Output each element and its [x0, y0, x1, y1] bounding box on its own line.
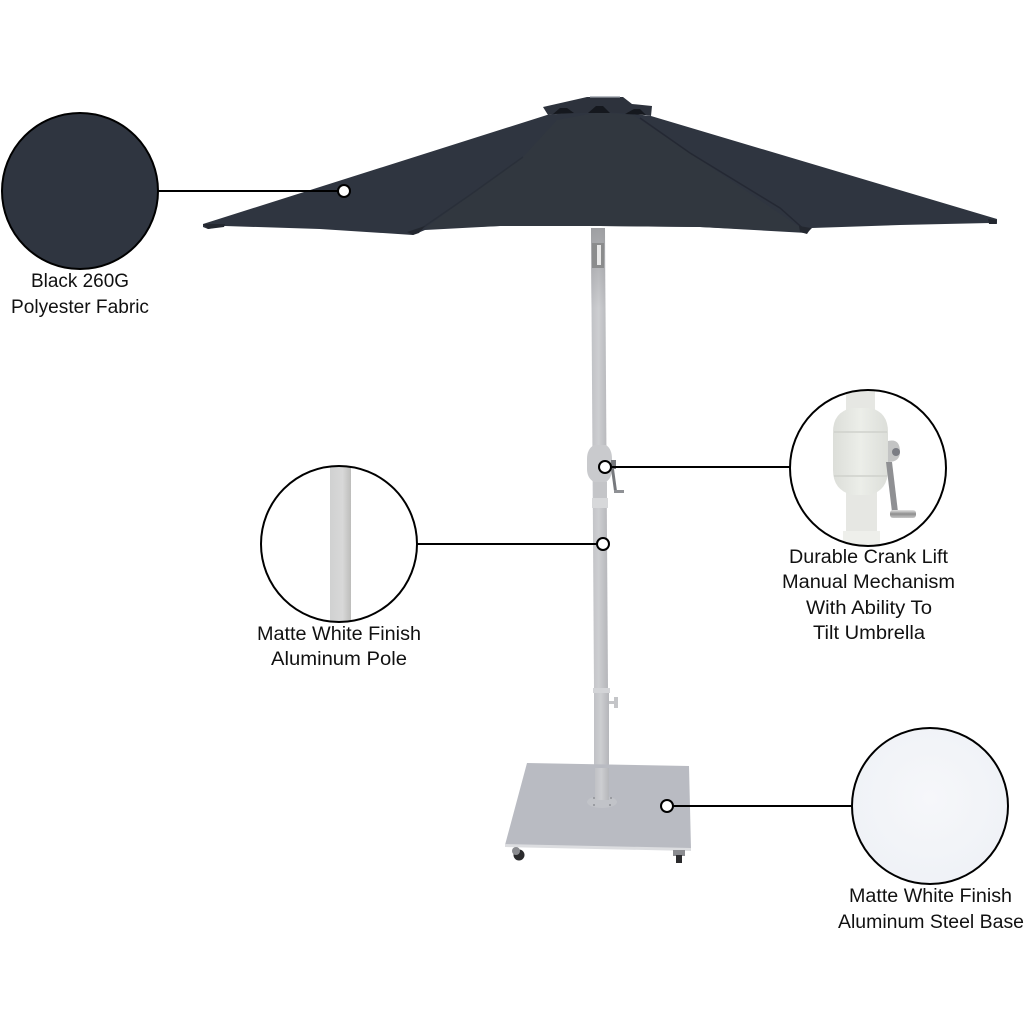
label: fabric: Polyester Fabric	[11, 297, 149, 318]
detail circle: crank	[790, 385, 946, 551]
label: crank: Tilt Umbrella	[813, 623, 925, 644]
canopy finial	[543, 96, 652, 116]
callout dot: pole	[597, 538, 609, 550]
callout dot: base	[661, 800, 673, 812]
callout dot: crank	[599, 461, 611, 473]
label: base: Aluminum Steel Base	[838, 912, 1024, 933]
label: crank: With Ability To	[806, 598, 932, 619]
label: pole: Matte White Finish	[257, 624, 421, 645]
detail circle: base	[852, 728, 1008, 884]
canopy tips	[203, 219, 997, 235]
callout dot: fabric	[338, 185, 350, 197]
label: base: Matte White Finish	[849, 886, 1012, 907]
detail circle: fabric	[2, 113, 158, 269]
callout: crank	[599, 461, 790, 473]
label: fabric: Black 260G	[31, 271, 129, 292]
base plate	[505, 763, 691, 863]
pole clamp knob	[609, 697, 618, 708]
callout: base	[661, 800, 852, 812]
label: crank: Durable Crank Lift	[789, 547, 949, 568]
casters	[512, 847, 685, 863]
detail circle: pole	[261, 465, 417, 623]
callout: pole	[417, 538, 609, 550]
label: crank: Manual Mechanism	[782, 572, 955, 593]
crank hub	[587, 445, 624, 508]
callout: fabric	[158, 185, 350, 197]
crank handle	[611, 460, 624, 493]
canopy	[203, 96, 997, 235]
pole	[591, 228, 618, 798]
canopy centre panel	[424, 112, 807, 232]
label: pole: Aluminum Pole	[271, 649, 407, 670]
